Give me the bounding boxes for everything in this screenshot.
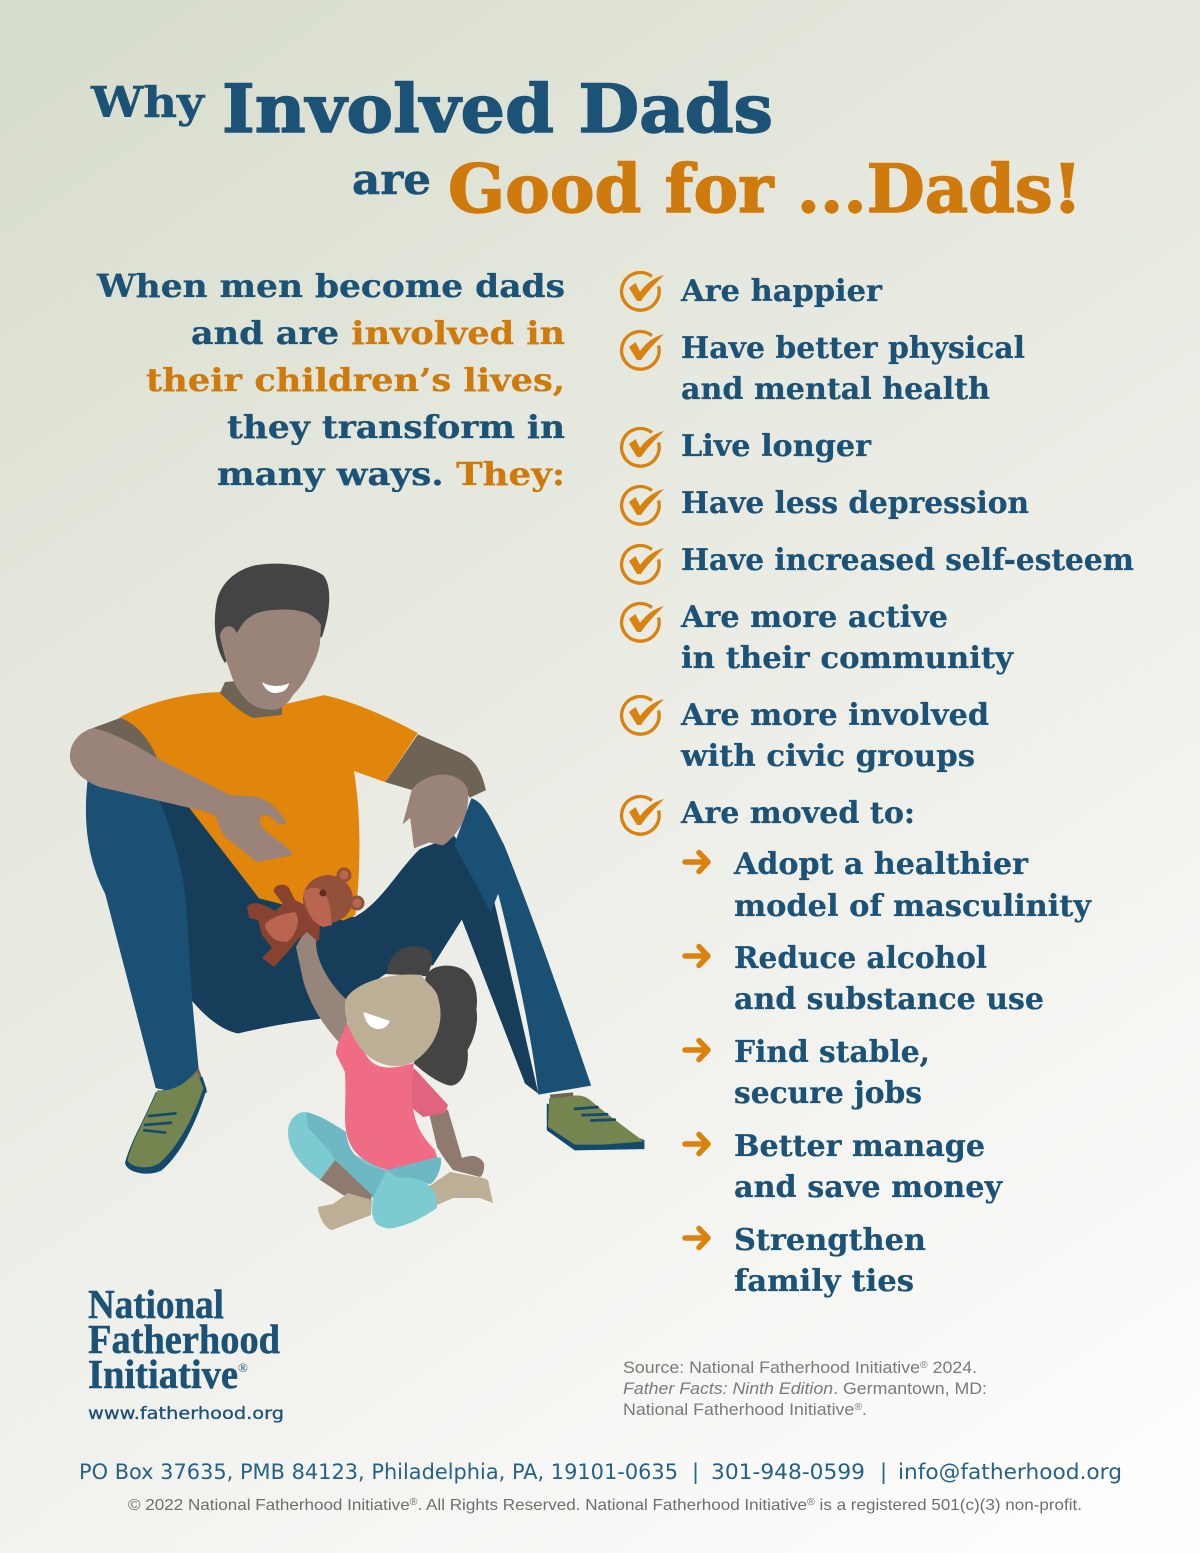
daughter hair: [387, 946, 477, 1086]
copyright line: ®: [807, 1497, 815, 1508]
sub-item: Find stable, secure jobs: [685, 1035, 930, 1111]
item: Are moved to: Are moved to:: [680, 796, 915, 831]
intro text: many ways. They:: [217, 455, 565, 493]
footer contact line: [79, 1460, 1122, 1485]
item: Have better physical and mental health: and mental health: [681, 372, 990, 407]
title: Involved Dads: [222, 70, 773, 148]
item: Are more active in their community: in their community: [681, 641, 1015, 676]
daughter shirt: [336, 1023, 448, 1170]
copyright line: . All Rights Reserved. National Fatherhood Initiative: [418, 1497, 807, 1514]
sub-item: Strengthen family ties: [685, 1223, 926, 1299]
illustration: father and daughter with teddy bear: [70, 564, 644, 1230]
father shoes: [125, 1068, 644, 1174]
item: Have less depression: Have less depression: [681, 486, 1029, 521]
father head: [215, 564, 329, 718]
item: Have increased self-esteem: Have increased self-esteem: [681, 543, 1134, 578]
item: Have better physical and mental health: [622, 331, 1025, 407]
intro text: they transform in: [227, 408, 565, 446]
item: Are more active in their community: [622, 600, 1015, 676]
source note: Father Facts: Ninth Edition . Germantown, MD:: [623, 1379, 987, 1398]
sub-item: Strengthen family ties: Strengthen: [734, 1223, 926, 1258]
father shirt: [119, 692, 418, 921]
teddy bear: [247, 868, 364, 967]
sub-item: Adopt a healthier model of masculinity: model of masculinity: [734, 889, 1093, 924]
father jeans: [86, 771, 591, 1095]
logo: National Fatherhood Initiative: National: [88, 1281, 224, 1327]
sub-item: Better manage and save money: [685, 1129, 1004, 1205]
intro text: [96, 267, 565, 493]
logo: National Fatherhood Initiative: [88, 1281, 284, 1424]
copyright line: © 2022 National Fatherhood Initiative: [128, 1497, 392, 1514]
intro text: and are involved in: [191, 314, 565, 352]
footer contact line: |: [692, 1460, 699, 1485]
title: Why: [90, 78, 206, 127]
sub-list: are moved to: [685, 847, 1093, 1299]
title: Good for ...Dads!: [448, 150, 1082, 228]
source note: ®: [854, 1402, 863, 1413]
benefits checklist: [622, 273, 1134, 834]
daughter legs: [288, 1112, 493, 1230]
source note: Source: National Fatherhood Initiative: [623, 1358, 907, 1377]
source note: National Fatherhood Initiative: [623, 1400, 844, 1419]
footer contact line: info@fatherhood.org: [898, 1460, 1122, 1484]
item: Are more active in their community: Are more active: [680, 600, 948, 635]
source note: [623, 1358, 987, 1419]
item: Have better physical and mental health: Have better physical: [681, 331, 1025, 366]
sub-item: Adopt a healthier model of masculinity: Adopt a healthier: [733, 847, 1029, 882]
sub-item: Reduce alcohol and substance use: [685, 941, 1044, 1017]
daughter face: [345, 975, 441, 1066]
source note: .: [862, 1400, 867, 1419]
father: [70, 564, 644, 1174]
sub-item: Better manage and save money: and save money: [734, 1170, 1004, 1205]
sub-item: Reduce alcohol and substance use: and substance use: [734, 982, 1044, 1017]
copyright line: is a registered 501(c)(3) non-profit.: [815, 1497, 1082, 1514]
logo: National Fatherhood Initiative: Initiative: [88, 1351, 238, 1397]
footer contact line: |: [880, 1460, 887, 1485]
intro text: When men become dads: [96, 267, 565, 305]
footer contact line: PO Box 37635, PMB 84123, Philadelphia, PA, 19101-0635: [79, 1460, 678, 1484]
sub-item: Strengthen family ties: family ties: [734, 1264, 914, 1299]
item: Live longer: Live longer: [681, 429, 872, 464]
daughter: [288, 932, 493, 1230]
footer contact line: 301-948-0599: [711, 1460, 865, 1484]
sub-item: Adopt a healthier model of masculinity: [685, 847, 1093, 924]
daughter lower arm: [427, 1105, 484, 1177]
sub-item: Find stable, secure jobs: Find stable,: [734, 1035, 930, 1070]
logo: National Fatherhood Initiative: ®: [238, 1360, 248, 1375]
logo: National Fatherhood Initiative: www.fatherhood.org: [88, 1404, 284, 1424]
item: Are more involved with civic groups: Are more involved: [680, 698, 989, 733]
item: Are more involved with civic groups: with civic groups: [680, 739, 975, 774]
source note: ®: [920, 1360, 928, 1371]
intro text: their children’s lives,: [146, 361, 565, 399]
father right arm: [385, 734, 486, 848]
copyright line: ®: [410, 1497, 418, 1508]
source note: 2024.: [928, 1358, 977, 1377]
sub-item: Find stable, secure jobs: secure jobs: [734, 1076, 922, 1111]
daughter raised arm: [296, 932, 347, 1050]
father left arm: [70, 718, 293, 862]
title: are: [352, 155, 431, 204]
title: [90, 70, 1082, 228]
item: Are more involved with civic groups: [622, 697, 989, 774]
sub-item: Reduce alcohol and substance use: Reduce alcohol: [734, 941, 987, 976]
sub-item: Better manage and save money: Better manage: [734, 1129, 985, 1164]
item: Are happier: Are happier: [680, 274, 883, 309]
logo: National Fatherhood Initiative: Fatherhood: [88, 1316, 280, 1362]
